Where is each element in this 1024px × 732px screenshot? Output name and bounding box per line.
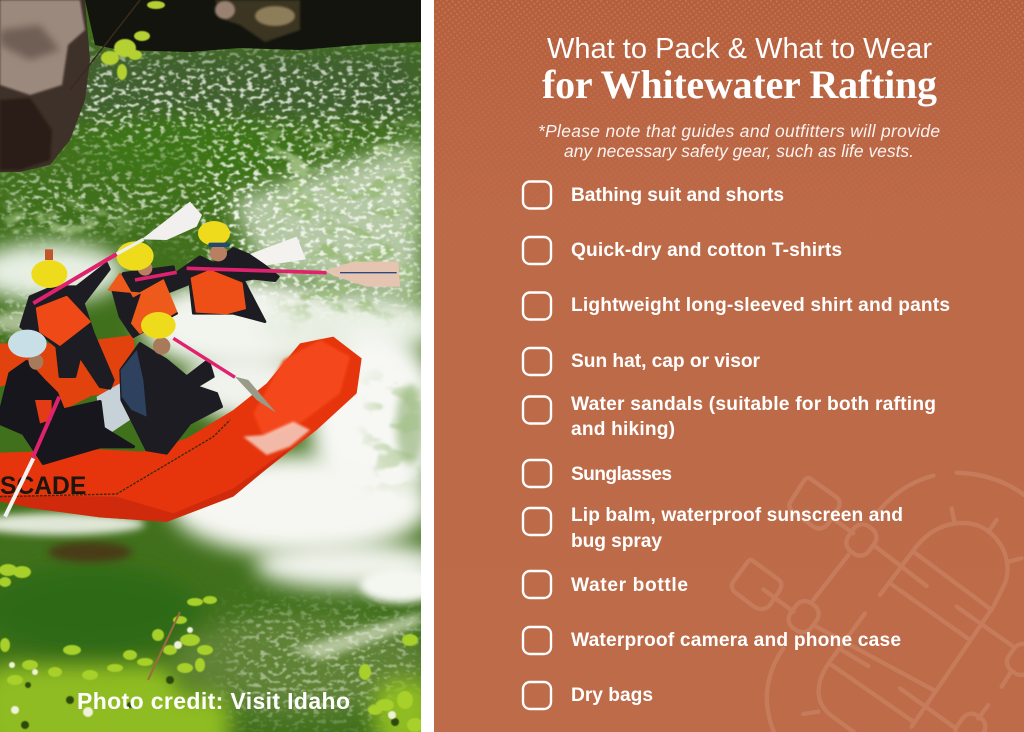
green showing through the foam (0, 130, 421, 480)
panel background (434, 0, 1024, 732)
safety note: any necessary safety gear, such as life vests. (564, 141, 914, 161)
item: bathing suit: Bathing suit and shorts (571, 185, 784, 206)
raft and rafters (0, 202, 400, 522)
paddle: rear (5, 397, 59, 517)
paddle: horizontal (135, 262, 400, 287)
person: rear left (0, 330, 133, 463)
item: sunglasses: Sunglasses (571, 464, 672, 485)
item: camera and phone case: Waterproof camera and phone case (571, 630, 901, 651)
item: water bottle: Water bottle (571, 575, 688, 596)
item: dry bags (523, 682, 653, 709)
photo credit: Photo credit: Visit Idaho (77, 688, 350, 714)
item: t-shirts: Quick-dry and cotton T-shirts (571, 240, 842, 261)
item: long-sleeved shirt: Lightweight long-sleeved shirt and pants (571, 295, 950, 316)
heading (542, 33, 937, 107)
item: long-sleeved shirt (523, 292, 950, 320)
overhanging branch (70, 0, 165, 90)
item: t-shirts (523, 237, 842, 264)
safety note (538, 121, 940, 161)
person: middle (108, 241, 177, 337)
rocks and dark shoreline (0, 0, 421, 172)
panel: packing checklist (434, 0, 1024, 732)
photo: whitewater raft on a green river (0, 0, 445, 732)
safety note: *Please note that guides and outfitters will provide (538, 121, 940, 141)
heading line 2: for Whitewater Rafting (542, 62, 937, 107)
item: bathing suit (523, 182, 784, 208)
paddle: upper white blade (33, 202, 202, 303)
item: sun hat (523, 348, 761, 375)
item: lip balm and sunscreen (523, 505, 903, 552)
item: sun hat: Sun hat, cap or visor (571, 351, 761, 372)
halftone texture (434, 0, 1024, 136)
raft floor gear (97, 383, 130, 433)
item: water sandals: and hiking) (571, 419, 675, 440)
item: water bottle (523, 571, 688, 598)
foam speckle (0, 55, 421, 720)
raft side tube (0, 337, 362, 522)
person: front (121, 312, 222, 453)
far raft tube (0, 335, 137, 397)
item: lip balm and sunscreen: bug spray (571, 531, 662, 552)
person: back right (165, 221, 278, 322)
raft lifeline (0, 420, 230, 497)
item: water sandals: Water sandals (suitable for both rafting (571, 394, 936, 415)
item: sunglasses (523, 460, 672, 487)
checklist (523, 182, 950, 709)
heading line 1: What to Pack & What to Wear (547, 33, 932, 65)
item: camera and phone case (523, 627, 901, 654)
raft line-art watermark (732, 473, 1024, 732)
item: dry bags: Dry bags (571, 685, 653, 706)
river water (0, 0, 430, 732)
paddle: rear white blade (250, 237, 306, 265)
raft lettering: SCADE (0, 473, 86, 500)
water splash on raft (243, 422, 310, 455)
person: back left (21, 249, 113, 388)
foreground foliage (0, 564, 435, 732)
item: water sandals (523, 394, 936, 440)
paddle: front (173, 338, 276, 413)
white foam masses (0, 140, 445, 660)
item: lip balm and sunscreen: Lip balm, waterproof sunscreen and (571, 505, 903, 526)
